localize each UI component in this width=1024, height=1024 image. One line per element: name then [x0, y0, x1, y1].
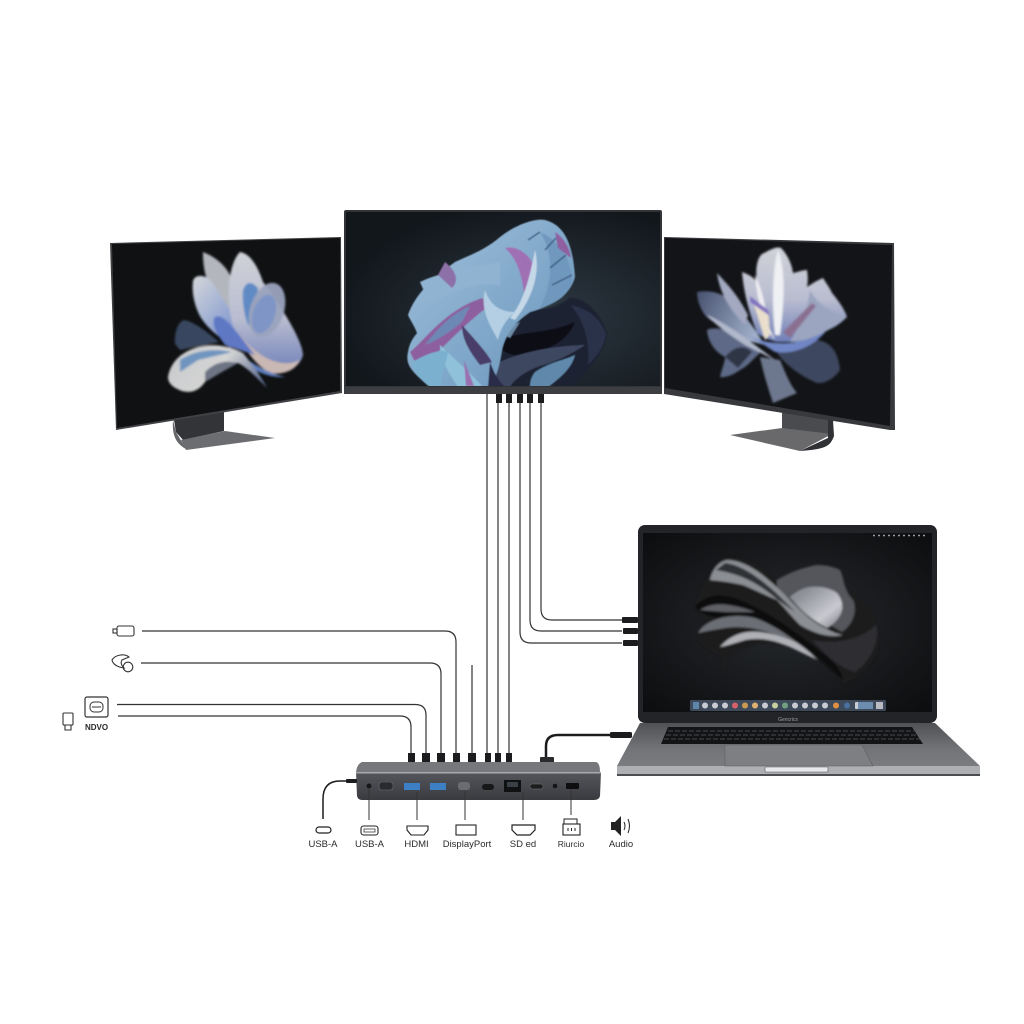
peripheral icon: headset — [112, 655, 133, 672]
center monitor — [344, 210, 662, 394]
legend: USB-A: USB-A — [308, 839, 338, 850]
laptop base — [617, 723, 980, 776]
dark wing — [175, 320, 219, 350]
laptop wallpaper — [695, 557, 878, 683]
ring petal — [242, 278, 292, 342]
laptop model label: Gencrics — [778, 717, 798, 723]
lower spike — [760, 357, 797, 403]
back right petal — [777, 565, 855, 632]
infographic: docking station multi-monitor diagram — [62, 210, 980, 849]
monitor connectors — [496, 394, 544, 403]
peripheral icon: NDVO display — [85, 697, 108, 732]
bottom wing — [168, 345, 267, 392]
center monitor chin — [344, 387, 662, 394]
legend: Riurcio — [558, 819, 584, 849]
legend: USB-A second — [355, 826, 385, 850]
bright petal — [790, 587, 842, 628]
right monitor — [664, 237, 895, 451]
laptop menu bar dots — [873, 534, 927, 536]
legend: DisplayPort — [443, 825, 492, 850]
port leader lines — [369, 789, 571, 820]
right dark petals — [812, 625, 877, 672]
right monitor screen — [665, 238, 892, 426]
dock ports — [366, 780, 579, 792]
center monitor screen — [346, 212, 660, 386]
legend: HDMI: HDMI — [404, 839, 429, 850]
port legend — [308, 816, 633, 850]
legend: Audio — [609, 816, 633, 850]
legend: HDMI — [404, 826, 429, 850]
laptop connectors — [622, 617, 638, 646]
laptop screen — [643, 533, 932, 712]
dock power cable — [540, 732, 632, 763]
second petal — [193, 276, 258, 350]
peripheral icon: plug — [63, 713, 73, 730]
left monitor — [110, 237, 342, 450]
dock connectors — [408, 753, 512, 763]
tall back petal — [203, 252, 250, 338]
peripheral icon: drive — [113, 626, 134, 636]
legend: USB-A — [308, 827, 338, 850]
main light blue blob — [407, 220, 575, 387]
center monitor fabric wallpaper — [407, 220, 607, 387]
vertical cable bundle — [487, 394, 622, 753]
left monitor stand — [173, 412, 275, 450]
center monitor frame — [344, 210, 662, 394]
left monitor frame — [110, 237, 342, 430]
right monitor frame — [664, 237, 895, 430]
docking station — [323, 753, 601, 820]
dock left cable — [323, 779, 357, 819]
main petal — [229, 252, 303, 373]
laptop dock bar — [690, 700, 886, 711]
left wing — [697, 291, 765, 345]
legend: DisplayPort: DisplayPort — [443, 839, 492, 850]
dock body top — [356, 762, 600, 772]
back petals — [742, 247, 847, 342]
legend: Audio: Audio — [609, 839, 633, 850]
legend: USB-A second: USB-A — [355, 839, 385, 850]
peripheral icon: NDVO display: NDVO — [85, 723, 108, 732]
left spike — [717, 273, 748, 325]
dock body front — [356, 772, 601, 800]
left monitor flower wallpaper — [168, 252, 303, 392]
laptop keyboard — [661, 727, 923, 744]
legend: SD ed: SD ed — [510, 839, 536, 850]
lower left petal — [707, 328, 760, 377]
laptop trackpad — [725, 745, 873, 766]
legend: Riurcio: Riurcio — [558, 839, 584, 849]
right monitor stand — [730, 411, 834, 451]
upper ribbon — [710, 560, 843, 636]
laptop — [617, 525, 980, 776]
overall dark silhouette — [695, 557, 878, 683]
legend: SD ed — [510, 825, 536, 850]
laptop lid — [638, 525, 937, 723]
laptop notch — [765, 767, 828, 772]
dark lower-right folds — [500, 298, 607, 386]
left monitor screen — [112, 238, 340, 428]
cables from center monitor — [487, 394, 638, 753]
middle dark ribbon — [695, 596, 843, 680]
peripheral cables to dock — [117, 631, 472, 753]
lower grey ribbons — [698, 616, 812, 655]
lower right petal — [777, 340, 840, 383]
right monitor lotus wallpaper — [697, 247, 847, 403]
